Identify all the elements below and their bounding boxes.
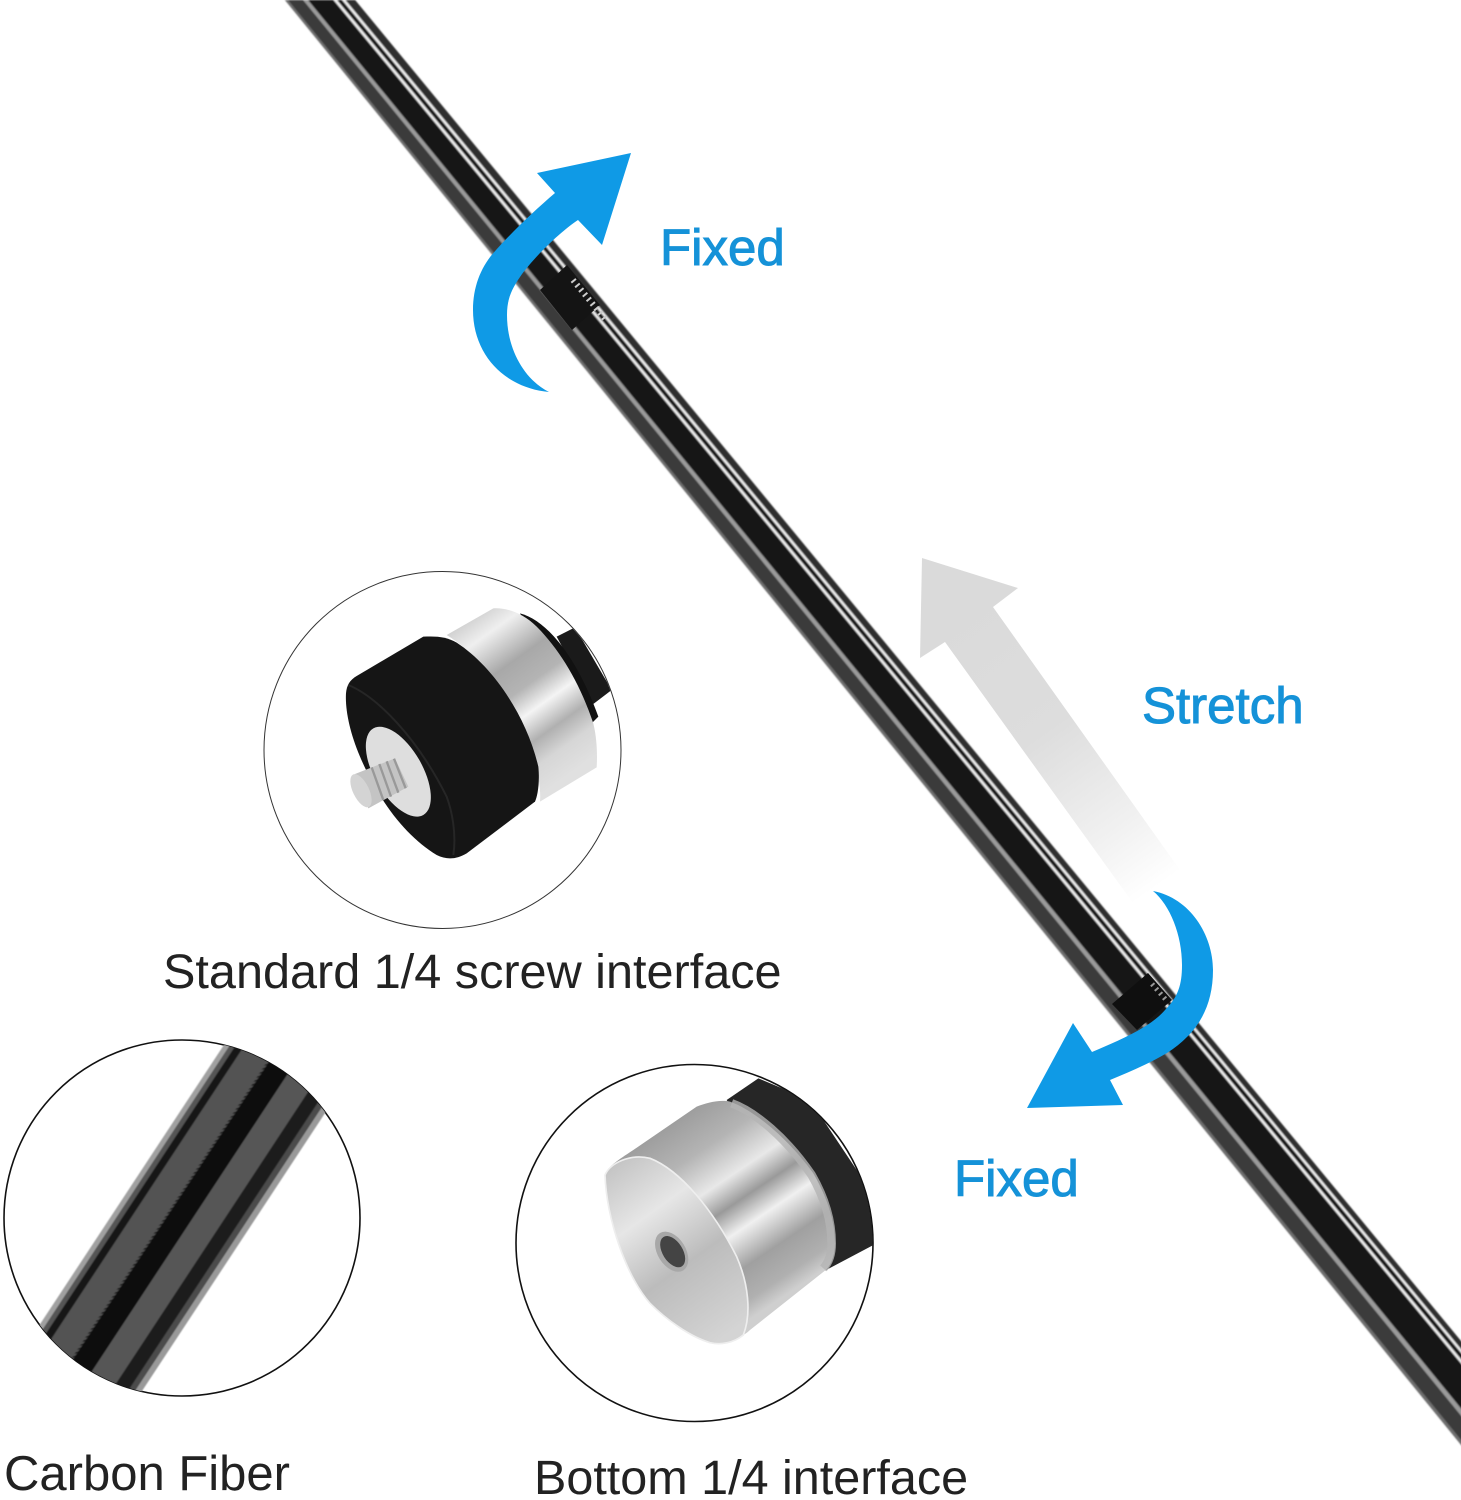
detail circle: carbon fiber surface bbox=[3, 1039, 361, 1397]
metal end face bbox=[605, 1157, 748, 1344]
foam inner edge bbox=[348, 685, 454, 855]
threaded hole bbox=[655, 1232, 688, 1272]
caption: Carbon Fiber: Carbon Fiber bbox=[4, 1447, 290, 1500]
metal cylinder bbox=[605, 1101, 835, 1344]
upper ribbed collar bbox=[540, 265, 605, 330]
label: Fixed (top): Fixed bbox=[660, 219, 785, 276]
arrow: upper blue rotation bbox=[473, 153, 631, 392]
rubber tube bbox=[727, 1078, 877, 1271]
rear rim of cap bbox=[732, 1103, 832, 1268]
label: Stretch: Stretch bbox=[1142, 677, 1304, 734]
arrow: lower blue rotation bbox=[1027, 891, 1213, 1108]
metal face bbox=[366, 726, 431, 817]
screw thread bbox=[346, 758, 408, 810]
rod bbox=[557, 627, 612, 704]
caption: Standard 1/4 screw interface: Standard 1/4 screw interface bbox=[163, 945, 782, 999]
silver ring bbox=[447, 608, 597, 802]
foam grip bbox=[346, 636, 539, 858]
lower ribbed collar bbox=[1112, 973, 1172, 1030]
label: Fixed (bottom): Fixed bbox=[954, 1150, 1079, 1207]
arrow: stretch (gray, fading) bbox=[920, 558, 1180, 903]
washer bbox=[520, 613, 598, 727]
detail circle: bottom 1/4 interface bbox=[516, 1064, 877, 1422]
detail circle: standard 1/4 screw end bbox=[264, 572, 621, 928]
